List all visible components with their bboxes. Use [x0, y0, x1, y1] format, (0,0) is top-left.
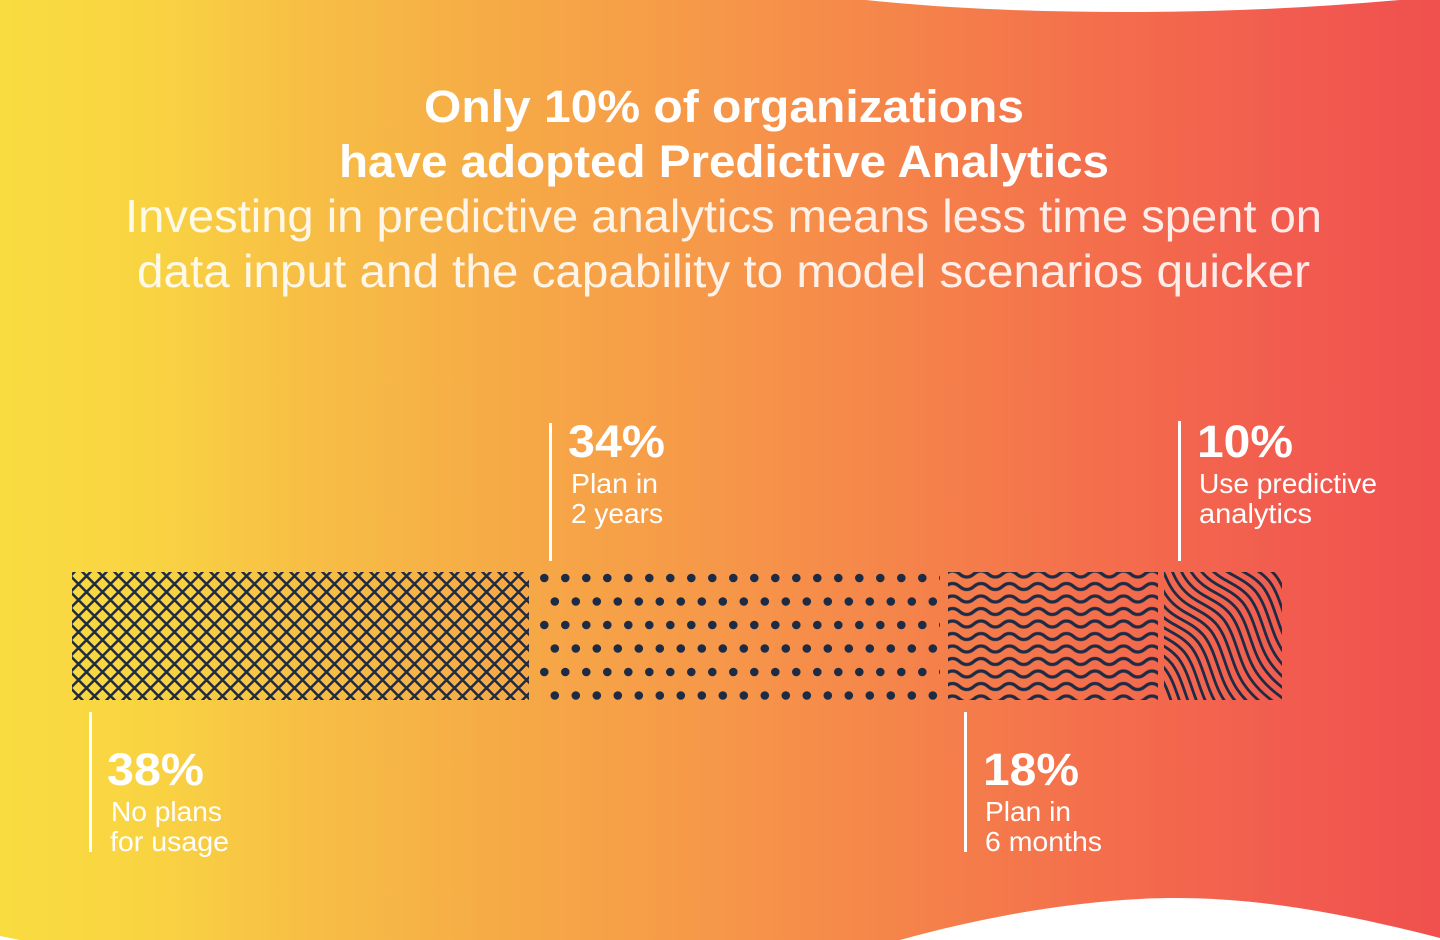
stacked bar chart: [72, 572, 1282, 700]
segment: 38% no plans, crosshatch: [72, 572, 529, 700]
segment: 18% plan in 6 months, waves: [948, 572, 1158, 700]
callout: 34% plan in 2 years: [549, 416, 665, 561]
title: Only 10% of organizations: [424, 81, 1024, 132]
callout: 38% no plans for usage: for usage: [110, 826, 229, 857]
top white wave: [866, 0, 1400, 12]
callout: 18% plan in 6 months: Plan in: [985, 796, 1071, 827]
callout: 18% plan in 6 months: [964, 712, 1102, 857]
bottom white wave: [900, 898, 1440, 940]
callout: 10% use predictive analytics: Use predictive: [1199, 468, 1377, 499]
callout: 34% plan in 2 years: Plan in: [571, 468, 658, 499]
title: have adopted Predictive Analytics: [339, 136, 1109, 187]
segment: 10% use predictive analytics, curved lines: [1164, 572, 1282, 700]
callout: 34% plan in 2 years: 2 years: [571, 498, 663, 529]
callout: 10% use predictive analytics: [1178, 416, 1377, 561]
callout: 38% no plans for usage: [89, 712, 229, 857]
callout: 10% use predictive analytics: analytics: [1199, 498, 1312, 529]
bottom-left white corner: [0, 936, 20, 940]
subtitle: data input and the capability to model scenarios quicker: [137, 245, 1310, 297]
callout: 34% plan in 2 years: 34%: [568, 416, 665, 467]
subtitle: Investing in predictive analytics means less time spent on: [125, 190, 1322, 242]
callout: 38% no plans for usage: No plans: [111, 796, 222, 827]
subtitle: [125, 190, 1322, 297]
callout: 10% use predictive analytics: 10%: [1197, 416, 1293, 467]
callout: 18% plan in 6 months: 6 months: [985, 826, 1102, 857]
title: [339, 81, 1109, 187]
callout: 38% no plans for usage: 38%: [107, 744, 204, 795]
segment: 34% plan in 2 years, dots: [540, 572, 940, 700]
callout: 18% plan in 6 months: 18%: [983, 744, 1079, 795]
